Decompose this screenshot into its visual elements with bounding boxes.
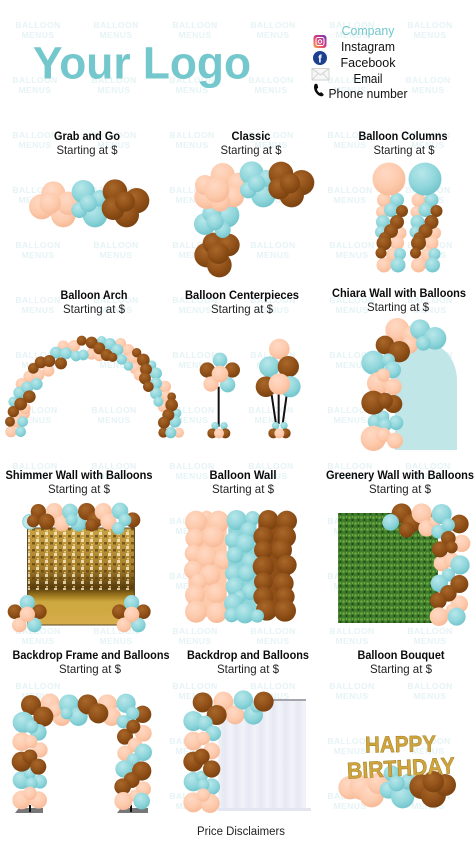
watermark pattern: BALLOON xyxy=(248,461,294,471)
watermark pattern: MENUS xyxy=(256,691,290,701)
watermark pattern: MENUS xyxy=(256,250,290,260)
watermark pattern: BALLOON xyxy=(407,20,453,30)
watermark pattern: MENUS xyxy=(99,305,133,315)
watermark pattern: MENUS xyxy=(21,305,55,315)
watermark pattern: BALLOON xyxy=(329,350,375,360)
watermark pattern: MENUS xyxy=(413,305,447,315)
panel: Balloon Wall xyxy=(184,468,297,623)
balloon garland xyxy=(382,503,470,626)
large centerpiece xyxy=(256,339,301,438)
heading: Balloon Wall xyxy=(210,468,276,482)
white curtain backdrop xyxy=(218,699,311,811)
balloon column right xyxy=(408,162,442,272)
watermark pattern: BALLOON xyxy=(15,20,61,30)
watermark pattern: MENUS xyxy=(333,85,367,95)
watermark pattern: BALLOON xyxy=(91,130,137,140)
panel: Chiara Wall with Balloons xyxy=(332,286,466,451)
watermark pattern: BALLOON xyxy=(12,75,58,85)
watermark pattern: BALLOON xyxy=(169,130,215,140)
icon: instagram xyxy=(314,35,326,48)
watermark pattern: BALLOON xyxy=(172,626,218,636)
watermark pattern: BALLOON xyxy=(15,626,61,636)
balloon garland xyxy=(29,179,149,227)
watermark pattern: BALLOON xyxy=(327,185,373,195)
watermark pattern: BALLOON xyxy=(91,405,137,415)
heading: Balloon Centerpieces xyxy=(185,288,299,302)
watermark pattern: BALLOON xyxy=(405,791,451,801)
chiara wall arch xyxy=(395,343,457,450)
watermark pattern: BALLOON xyxy=(169,736,215,746)
balloon frame xyxy=(12,694,152,810)
icon: email envelope xyxy=(312,68,329,80)
watermark pattern: BALLOON xyxy=(329,240,375,250)
watermark pattern: BALLOON xyxy=(327,571,373,581)
watermark pattern: BALLOON xyxy=(169,75,215,85)
watermark pattern: BALLOON xyxy=(169,461,215,471)
watermark pattern: BALLOON xyxy=(407,295,453,305)
watermark pattern: BALLOON xyxy=(327,791,373,801)
price: Starting at $ xyxy=(212,482,274,496)
balloon cluster left xyxy=(8,595,47,632)
heading: Backdrop and Balloons xyxy=(187,648,309,662)
greenery wall xyxy=(338,513,438,623)
watermark pattern: MENUS xyxy=(333,415,367,425)
watermark pattern: MENUS xyxy=(411,801,445,811)
heading: Chiara Wall with Balloons xyxy=(332,286,466,300)
watermark pattern: MENUS xyxy=(413,360,447,370)
watermark pattern: MENUS xyxy=(175,85,209,95)
watermark pattern: BALLOON xyxy=(15,240,61,250)
watermark pattern: BALLOON xyxy=(407,350,453,360)
watermark pattern: MENUS xyxy=(333,746,367,756)
footer: price disclaimers: Price Disclaimers xyxy=(197,826,285,838)
watermark pattern: MENUS xyxy=(254,471,288,481)
heading: Grab and Go xyxy=(54,129,120,143)
watermark pattern: BALLOON xyxy=(329,295,375,305)
watermark pattern: MENUS xyxy=(333,195,367,205)
watermark pattern: BALLOON xyxy=(405,405,451,415)
instagram label: Instagram xyxy=(341,39,395,54)
watermark pattern: BALLOON xyxy=(12,130,58,140)
frame stand bases xyxy=(15,805,148,813)
watermark pattern: MENUS xyxy=(335,636,369,646)
heading: Classic xyxy=(232,129,271,143)
watermark pattern: MENUS xyxy=(178,30,212,40)
watermark pattern: BALLOON xyxy=(327,130,373,140)
watermark pattern: BALLOON xyxy=(93,295,139,305)
watermark pattern: MENUS xyxy=(178,691,212,701)
price: Starting at $ xyxy=(211,302,273,316)
watermark pattern: BALLOON xyxy=(93,240,139,250)
price: Starting at $ xyxy=(63,302,125,316)
panel: Backdrop and Balloons xyxy=(183,648,311,813)
icon: phone xyxy=(314,84,324,96)
panel: Balloon Columns xyxy=(358,129,448,272)
watermark pattern: MENUS xyxy=(256,305,290,315)
watermark pattern: MENUS xyxy=(178,360,212,370)
watermark pattern: BALLOON xyxy=(407,681,453,691)
watermark pattern: BALLOON xyxy=(172,240,218,250)
watermark pattern: BALLOON xyxy=(405,185,451,195)
price: Starting at $ xyxy=(220,143,282,157)
watermark pattern: BALLOON xyxy=(15,350,61,360)
watermark pattern: MENUS xyxy=(21,636,55,646)
panel: Balloon Bouquet xyxy=(338,648,456,808)
watermark pattern: MENUS xyxy=(21,360,55,370)
watermark pattern: MENUS xyxy=(97,415,131,425)
watermark pattern: MENUS xyxy=(413,250,447,260)
watermark pattern: MENUS xyxy=(18,85,52,95)
watermark pattern: MENUS xyxy=(18,140,52,150)
panel: Grab and Go xyxy=(29,129,149,227)
panel: Classic xyxy=(194,129,314,277)
watermark pattern: MENUS xyxy=(254,415,288,425)
watermark pattern: MENUS xyxy=(175,526,209,536)
watermark pattern: BALLOON xyxy=(327,75,373,85)
watermark pattern: MENUS xyxy=(333,471,367,481)
watermark pattern: MENUS xyxy=(333,581,367,591)
watermark pattern: BALLOON xyxy=(329,20,375,30)
balloon arch xyxy=(5,336,184,438)
watermark pattern: BALLOON xyxy=(250,681,296,691)
watermark pattern: MENUS xyxy=(21,691,55,701)
watermark pattern: BALLOON xyxy=(172,20,218,30)
watermark pattern: MENUS xyxy=(175,195,209,205)
icon: facebook: f xyxy=(318,54,322,66)
watermark pattern: BALLOON xyxy=(250,240,296,250)
small centerpiece xyxy=(200,353,240,438)
price: Starting at $ xyxy=(370,662,432,676)
watermark pattern: BALLOON xyxy=(93,350,139,360)
gold shimmer wall xyxy=(28,528,134,625)
watermark pattern: MENUS xyxy=(335,30,369,40)
watermark pattern: MENUS xyxy=(99,360,133,370)
panel: Balloon Centerpieces xyxy=(185,288,301,438)
balloon garland xyxy=(361,318,446,451)
heading: Shimmer Wall with Balloons xyxy=(6,468,153,482)
watermark pattern: BALLOON xyxy=(407,240,453,250)
watermark pattern: MENUS xyxy=(256,360,290,370)
watermark pattern: BALLOON xyxy=(169,791,215,801)
watermark pattern: MENUS xyxy=(97,195,131,205)
watermark pattern: BALLOON xyxy=(172,350,218,360)
panel: Balloon Arch xyxy=(5,288,184,438)
watermark pattern: BALLOON xyxy=(405,461,451,471)
watermark pattern: MENUS xyxy=(175,471,209,481)
watermark pattern: MENUS xyxy=(175,581,209,591)
watermark pattern: MENUS xyxy=(256,30,290,40)
watermark pattern: MENUS xyxy=(97,140,131,150)
watermark pattern: BALLOON xyxy=(329,626,375,636)
watermark pattern: BALLOON xyxy=(169,185,215,195)
watermark pattern: MENUS xyxy=(178,305,212,315)
price: Starting at $ xyxy=(374,143,435,157)
watermark pattern: BALLOON xyxy=(169,405,215,415)
watermark pattern: MENUS xyxy=(18,195,52,205)
watermark pattern: BALLOON xyxy=(91,75,137,85)
watermark pattern: MENUS xyxy=(256,636,290,646)
watermark pattern: MENUS xyxy=(175,140,209,150)
price: Starting at $ xyxy=(217,662,279,676)
watermark pattern: BALLOON xyxy=(169,516,215,526)
watermark pattern: MENUS xyxy=(411,746,445,756)
watermark pattern: BALLOON xyxy=(91,185,137,195)
watermark pattern: BALLOON xyxy=(327,405,373,415)
price: Starting at $ xyxy=(59,662,121,676)
panel: Backdrop Frame and Balloons xyxy=(12,648,170,813)
phone number label: Phone number xyxy=(328,86,408,101)
watermark pattern: BALLOON xyxy=(169,571,215,581)
watermark pattern: MENUS xyxy=(175,415,209,425)
watermark pattern: MENUS xyxy=(335,250,369,260)
price: Starting at $ xyxy=(48,482,110,496)
price: Starting at $ xyxy=(369,482,431,496)
watermark pattern: MENUS xyxy=(333,526,367,536)
watermark pattern: MENUS xyxy=(178,250,212,260)
watermark pattern: MENUS xyxy=(411,195,445,205)
facebook label: Facebook xyxy=(340,55,396,70)
watermark pattern: BALLOON xyxy=(250,626,296,636)
foil letters: happy birthday xyxy=(346,730,456,784)
company name: Company xyxy=(342,23,395,38)
watermark pattern: BALLOON xyxy=(248,75,294,85)
watermark pattern: MENUS xyxy=(18,415,52,425)
balloon wall xyxy=(184,510,297,623)
foil letters: happy birthday: BIRTHDAY xyxy=(346,752,456,784)
watermark pattern: BALLOON xyxy=(12,185,58,195)
watermark pattern: MENUS xyxy=(333,801,367,811)
heading: Balloon Bouquet xyxy=(358,648,444,662)
balloon cluster right xyxy=(112,595,151,632)
balloon column left xyxy=(372,162,408,272)
balloon garland xyxy=(183,690,274,813)
contact block xyxy=(312,23,408,101)
heading: Balloon Columns xyxy=(358,129,448,143)
watermark pattern: BALLOON xyxy=(329,681,375,691)
watermark pattern: MENUS xyxy=(18,471,52,481)
watermark pattern: MENUS xyxy=(254,195,288,205)
watermark pattern: BALLOON xyxy=(248,405,294,415)
balloon garland xyxy=(23,503,140,535)
watermark pattern: BALLOON xyxy=(327,516,373,526)
watermark pattern: BALLOON xyxy=(250,20,296,30)
watermark pattern: BALLOON xyxy=(93,20,139,30)
watermark pattern: MENUS xyxy=(175,801,209,811)
watermark pattern: MENUS xyxy=(99,30,133,40)
watermark pattern: BALLOON xyxy=(172,681,218,691)
watermark pattern: BALLOON xyxy=(172,295,218,305)
watermark pattern: MENUS xyxy=(21,30,55,40)
watermark pattern: BALLOON xyxy=(15,295,61,305)
balloon cluster xyxy=(338,765,456,808)
watermark pattern: MENUS xyxy=(411,415,445,425)
watermark pattern: BALLOON xyxy=(12,461,58,471)
watermark pattern: BALLOON xyxy=(15,681,61,691)
watermark pattern: MENUS xyxy=(99,636,133,646)
title: Your Logo: Your Logo xyxy=(33,38,251,88)
watermark pattern: MENUS xyxy=(335,360,369,370)
watermark pattern: BALLOON xyxy=(407,626,453,636)
watermark pattern: MENUS xyxy=(97,85,131,95)
watermark pattern: MENUS xyxy=(335,691,369,701)
watermark pattern: MENUS xyxy=(178,636,212,646)
email label: Email xyxy=(354,71,383,86)
balloon garland xyxy=(194,161,314,277)
price: Starting at $ xyxy=(56,143,118,157)
watermark pattern: BALLOON xyxy=(250,295,296,305)
watermark pattern: MENUS xyxy=(411,85,445,95)
watermark pattern: BALLOON xyxy=(250,350,296,360)
panel: Shimmer Wall with Balloons xyxy=(6,468,153,632)
heading: Backdrop Frame and Balloons xyxy=(12,648,170,662)
watermark pattern: BALLOON xyxy=(405,75,451,85)
watermark pattern: MENUS xyxy=(411,471,445,481)
watermark pattern: MENUS xyxy=(413,691,447,701)
watermark pattern: BALLOON xyxy=(93,626,139,636)
watermark pattern: MENUS xyxy=(335,305,369,315)
watermark pattern: BALLOON xyxy=(91,461,137,471)
watermark pattern: MENUS xyxy=(254,140,288,150)
watermark pattern: BALLOON xyxy=(405,130,451,140)
watermark pattern: MENUS xyxy=(175,746,209,756)
watermark pattern: MENUS xyxy=(97,471,131,481)
watermark pattern: BALLOON xyxy=(12,405,58,415)
watermark pattern: BALLOON xyxy=(248,130,294,140)
heading: Balloon Arch xyxy=(60,288,128,302)
watermark pattern: MENUS xyxy=(21,250,55,260)
watermark pattern: MENUS xyxy=(413,30,447,40)
watermark pattern: BALLOON xyxy=(327,461,373,471)
watermark pattern: MENUS xyxy=(411,140,445,150)
panel: Greenery Wall with Balloons xyxy=(326,468,474,626)
watermark pattern: BALLOON xyxy=(248,185,294,195)
watermark pattern: MENUS xyxy=(99,250,133,260)
price: Starting at $ xyxy=(367,300,429,314)
watermark pattern: MENUS xyxy=(333,140,367,150)
watermark pattern: MENUS xyxy=(254,85,288,95)
watermark pattern: BALLOON xyxy=(327,736,373,746)
foil letters: happy birthday: HAPPY xyxy=(365,730,436,758)
watermark pattern: MENUS xyxy=(413,636,447,646)
watermark pattern: BALLOON xyxy=(405,736,451,746)
